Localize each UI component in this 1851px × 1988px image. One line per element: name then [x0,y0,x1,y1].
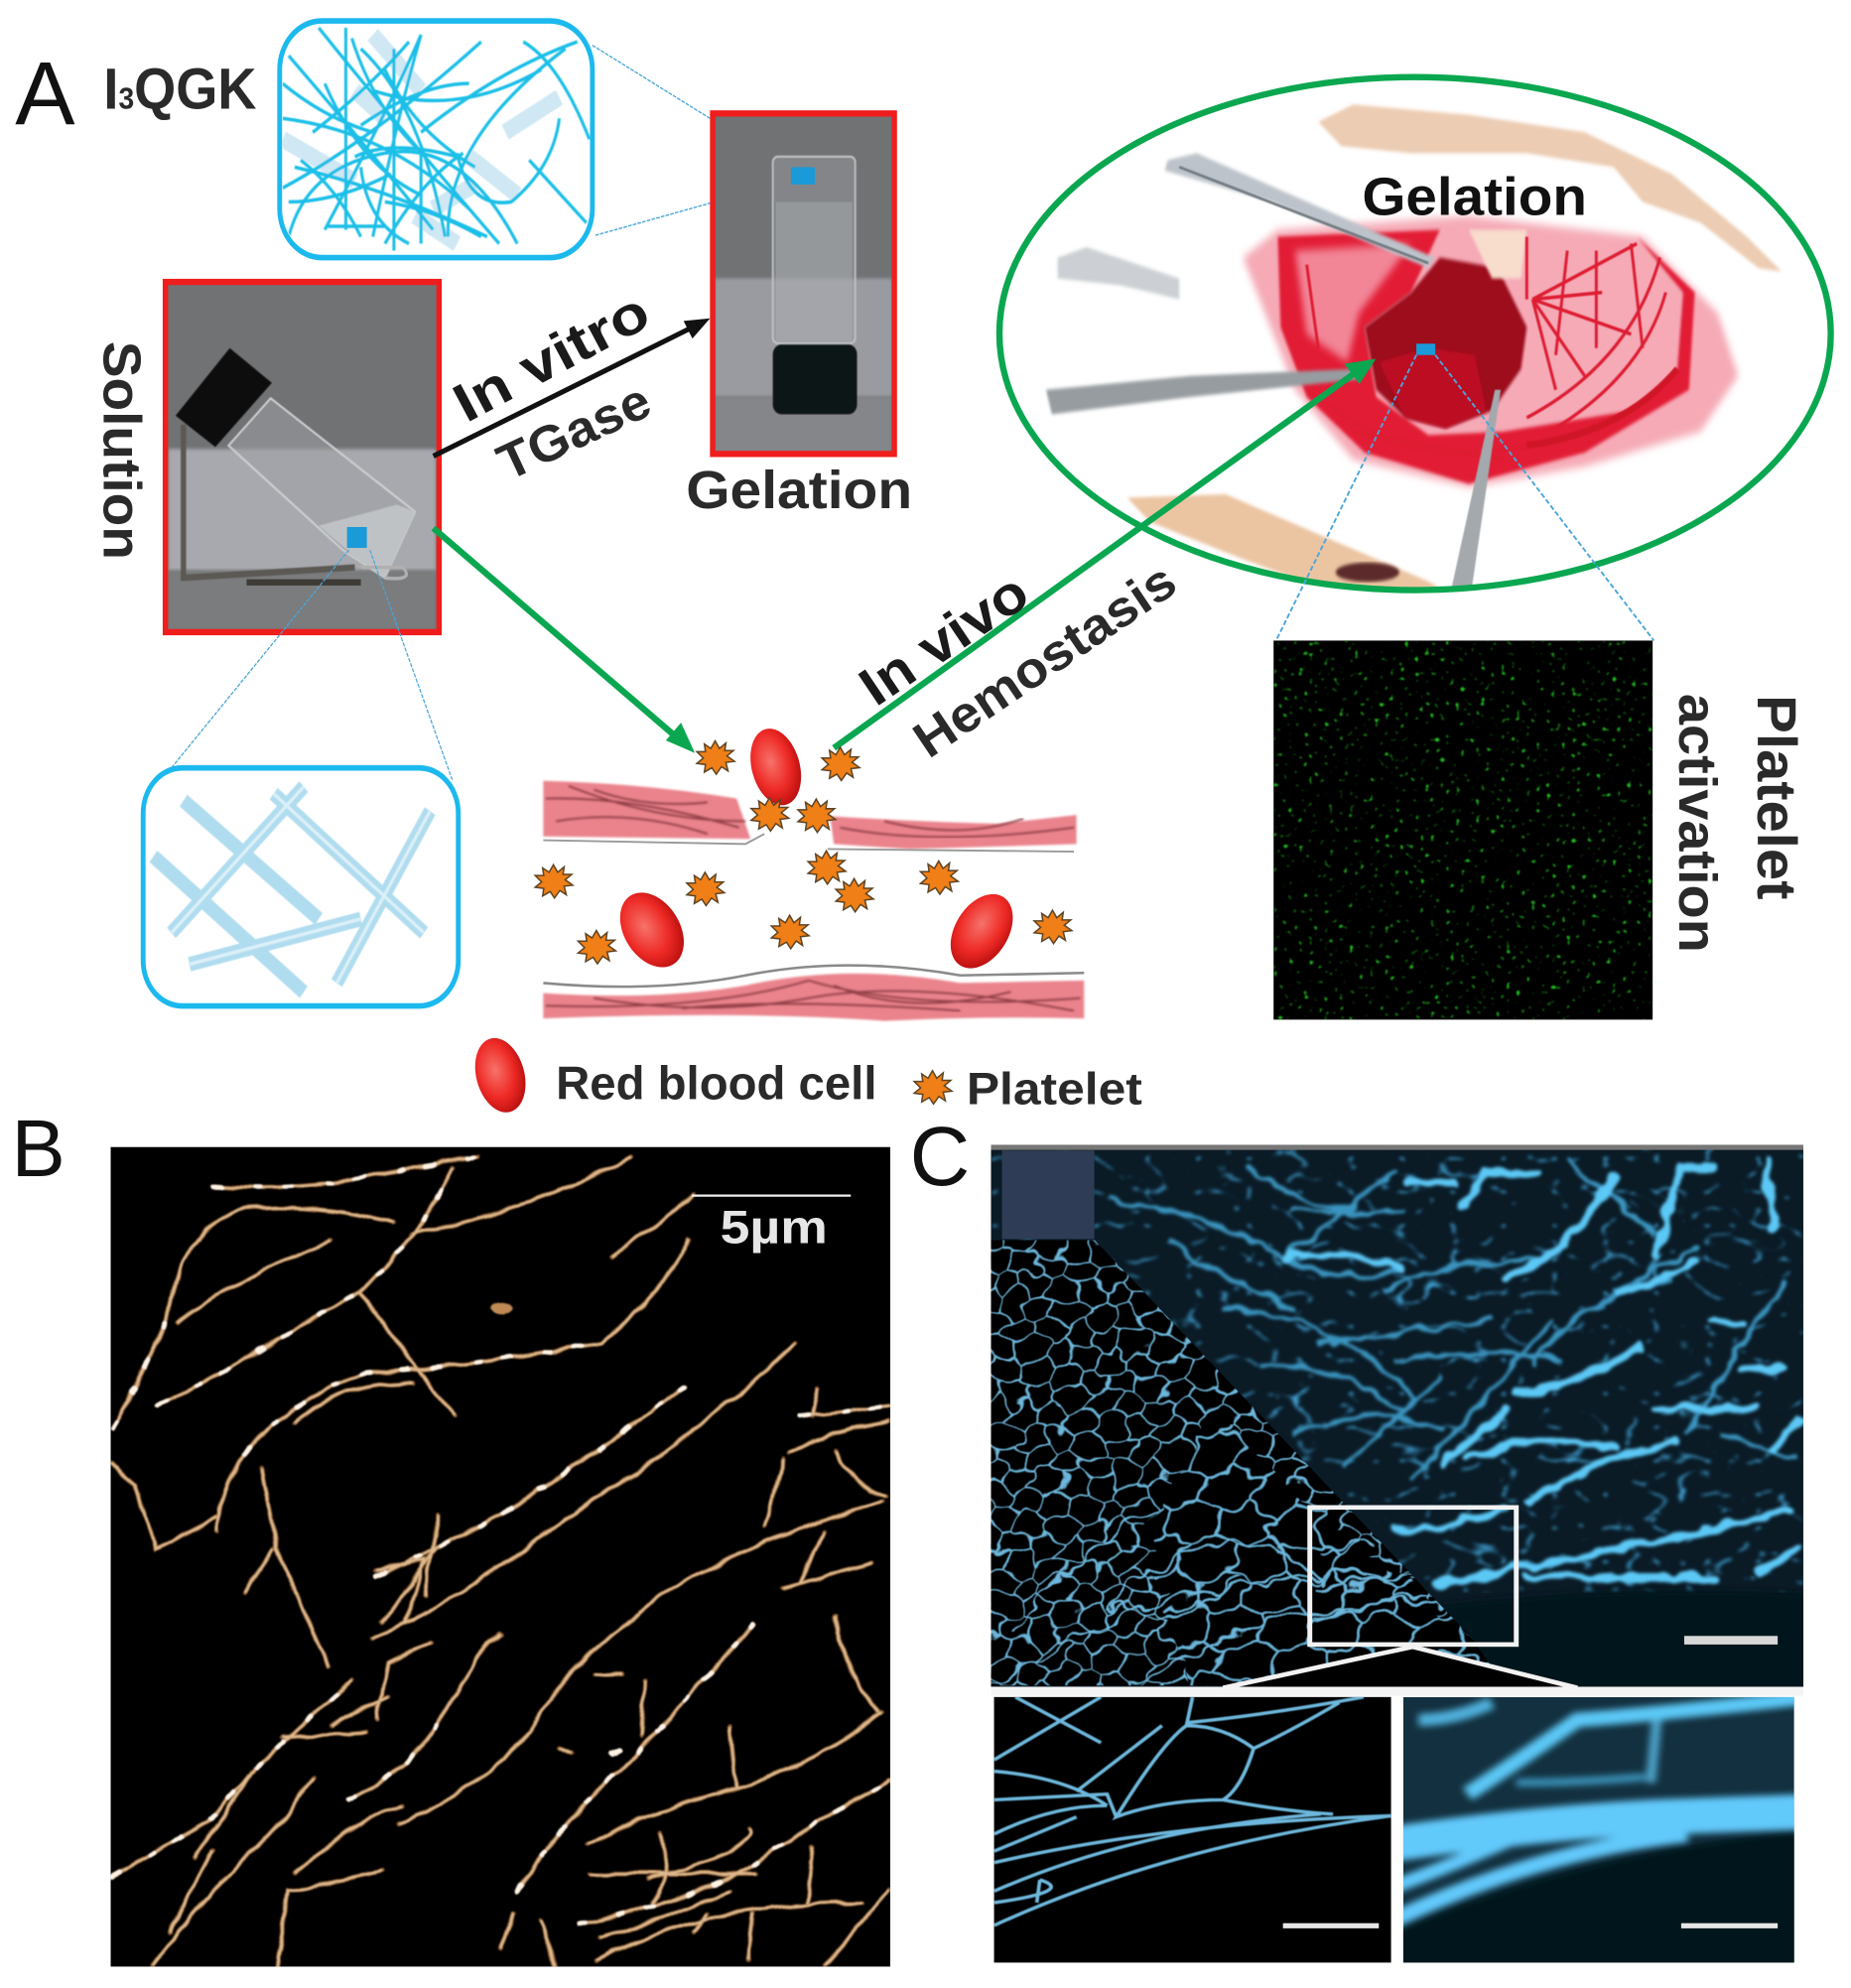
marker: solution sample [347,527,367,548]
inset: nanofiber gel network [280,21,593,258]
label: I3QGK: I3QGK [103,57,256,121]
zoom callout wedge [1217,1647,1583,1688]
arrow: in vitro [434,319,710,457]
legend: red blood cell and platelet [467,1032,1142,1119]
inset: solution nanofibers [143,768,459,1006]
inset: mesh close-up [994,1697,1391,1962]
divider band [991,1686,1803,1696]
vessel lower wall [543,966,1084,1021]
photo: surgical site in ellipse [999,77,1831,598]
scale bar: inset right [1681,1923,1778,1928]
connector lines: solution inset to vial [172,550,453,780]
main image: super-resolved mesh [991,1241,1490,1685]
top edge [991,1144,1803,1150]
label: Gelation under vial: Gelation [686,462,912,520]
platelets [535,741,1072,964]
icon: red blood cell [467,1032,533,1119]
label: Gelation on surgical site: Gelation [1362,168,1587,226]
marker: gel sample [791,167,815,185]
zoom box [1310,1508,1517,1645]
panel letter B: B [11,1104,66,1194]
scale bar: inset left [1283,1923,1379,1928]
label: In vitro: In vitro [443,280,659,434]
panel C: network micrographs [967,1144,1821,1983]
legend label: Red blood cell: Red blood cell [556,1057,876,1110]
dark square overlay [1002,1150,1094,1239]
inset: confocal close-up [1403,1697,1794,1963]
label: Solution: Solution [91,341,150,560]
scale label: 5 micrometers: 5µm [721,1201,828,1254]
vessel upper wall left [543,781,764,844]
panel A: schematic zoom layer [143,21,894,1006]
panel B: fibril micrograph [111,1147,890,1966]
photo: gelation vial [713,113,894,454]
label: Platelet: Platelet [1746,695,1808,899]
red blood cells [607,723,1025,980]
label: activation: activation [1667,694,1726,953]
image: platelet activation fluorescence [1273,640,1653,1019]
marker: in vivo gel sample [1416,343,1435,355]
green ellipse outline [999,77,1831,591]
label: In vivo: In vivo [848,561,1039,718]
arrow: in vivo green [834,359,1376,748]
connector lines: gel site to platelet image [1276,355,1653,640]
photo: solution vial [166,282,439,632]
illustration: blood vessel [535,723,1084,1021]
label: Hemostasis: Hemostasis [903,552,1186,768]
panel letter C: C [910,1110,970,1203]
vessel upper wall right [828,815,1077,852]
legend label: Platelet: Platelet [967,1064,1142,1115]
label: TGase: TGase [488,371,659,491]
scale bar [692,1194,851,1198]
arrow: green to wound [434,528,695,753]
panel letter A: A [15,44,75,144]
connector lines: gel inset to vial [593,46,794,235]
main image: confocal side [991,1147,1821,1708]
scale bar: main [1684,1636,1778,1645]
icon: platelet [914,1071,952,1104]
